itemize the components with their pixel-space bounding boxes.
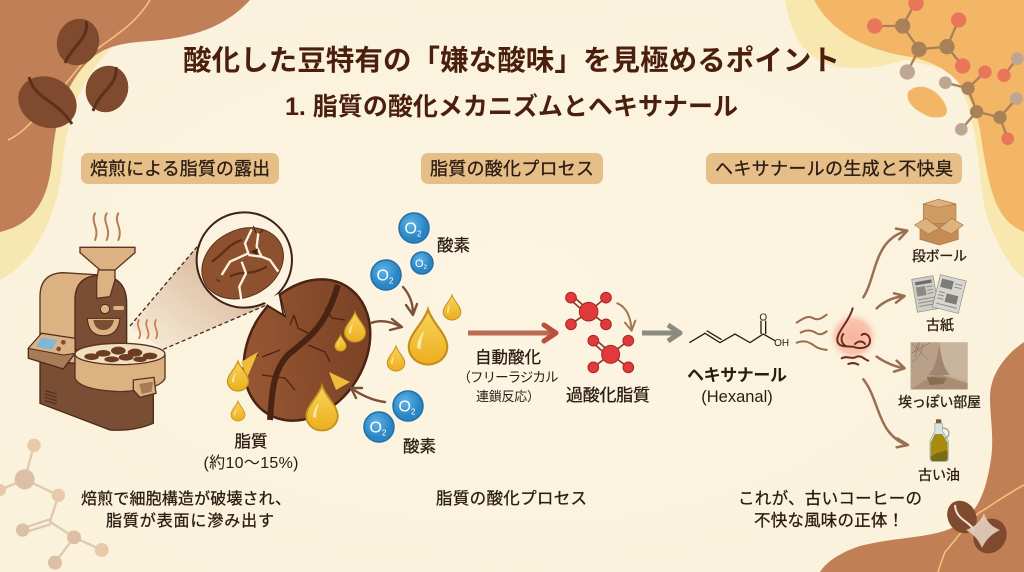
icons: oxygen molecules	[364, 213, 433, 442]
callout: magnified cracked bean	[189, 212, 296, 316]
icons: oxygen molecules: O	[370, 420, 382, 436]
arrow: auto-oxidation	[468, 325, 556, 341]
label: dusty room: 埃っぽい部屋	[898, 394, 981, 410]
icons: oxygen molecules: O	[399, 398, 411, 416]
icons: oil drops	[387, 295, 461, 371]
text: roasting caption: 焙煎で細胞構造が破壊され、	[81, 490, 291, 508]
text: conclusion caption: これが、古いコーヒーの	[738, 489, 922, 508]
icon: coffee roaster	[28, 213, 165, 430]
icons: oxygen molecules: O	[405, 220, 417, 238]
label: hexanal	[687, 366, 787, 406]
text: auto-oxidation: 連鎖反応）	[476, 389, 540, 404]
subtitle: 1. 脂質の酸化メカニズムとヘキサナール	[285, 92, 738, 121]
icon: peroxide molecules	[566, 292, 635, 373]
heading: roasting: 焙煎による脂質の露出	[90, 159, 270, 179]
icons: oxygen molecules: 2	[417, 230, 422, 238]
label: lipid	[204, 432, 298, 472]
heading: oxidation: 脂質の酸化プロセス	[430, 159, 594, 179]
label: cardboard: 段ボール	[912, 248, 967, 264]
text: conclusion caption	[738, 489, 922, 530]
text: auto-oxidation	[458, 348, 558, 404]
decoration: top-right orange wave	[785, 0, 1024, 278]
heading: hexanal	[706, 153, 962, 184]
icon: nose with odor waves	[797, 308, 879, 365]
text: roasting caption	[81, 490, 291, 530]
icons: oxygen molecules: 2	[382, 428, 387, 438]
text: auto-oxidation: （フリーラジカル	[458, 370, 558, 385]
icons: oxygen molecules: 2	[411, 408, 416, 416]
icon: oil bottle	[930, 419, 949, 462]
decoration: top-left brown wave	[0, 0, 250, 280]
label: oxygen bottom: 酸素	[403, 437, 436, 456]
heading: oxidation	[421, 153, 603, 184]
decoration: molecule top-right	[867, 0, 1024, 145]
label: oxygen top: 酸素	[437, 236, 470, 255]
icons: oxygen molecules: 2	[424, 265, 428, 271]
title: 酸化した豆特有の「嫌な酸味」を見極めるポイント	[183, 45, 840, 77]
chart: hexanal structure	[689, 312, 789, 349]
decoration: bottom-right brown wave	[820, 342, 1024, 572]
icon: dusty room	[911, 342, 968, 389]
heading: hexanal: ヘキサナールの生成と不快臭	[715, 159, 953, 179]
arrow: to hexanal	[642, 325, 680, 341]
icons: oxygen molecules: 2	[389, 276, 394, 286]
arrows: nose to smells	[863, 229, 908, 447]
arrows: oxygen to oil	[351, 287, 417, 402]
label: old oil: 古い油	[918, 467, 960, 483]
icon: cardboard box	[915, 199, 963, 245]
text: oxidation caption: 脂質の酸化プロセス	[436, 489, 587, 508]
text: roasting caption: 脂質が表面に滲み出す	[106, 512, 274, 530]
icons: oxygen molecules: O	[377, 268, 389, 284]
decoration: coffee beans top-left	[10, 13, 135, 138]
magnification cone	[130, 243, 267, 349]
text: conclusion caption: 不快な風味の正体！	[754, 511, 904, 530]
text: auto-oxidation: 自動酸化	[475, 348, 541, 367]
label: hexanal: ヘキサナール	[687, 366, 787, 385]
label: lipid: (約10〜15%)	[204, 454, 298, 472]
label: peroxide lipid: 過酸化脂質	[566, 386, 650, 405]
chart: hexanal structure: O	[759, 312, 767, 323]
label: lipid: 脂質	[234, 432, 268, 451]
icon: newspapers	[912, 275, 966, 313]
icon: large coffee bean with oil	[218, 256, 396, 444]
chart: hexanal structure: OH	[774, 338, 789, 349]
heading: roasting	[81, 153, 279, 184]
icons: oxygen molecules: O	[415, 258, 424, 270]
decoration: bottom-left molecule	[0, 439, 109, 570]
label: hexanal: (Hexanal)	[701, 388, 773, 406]
decoration: beans and sparkle bottom-right	[941, 495, 1013, 560]
label: old paper: 古紙	[926, 317, 954, 333]
